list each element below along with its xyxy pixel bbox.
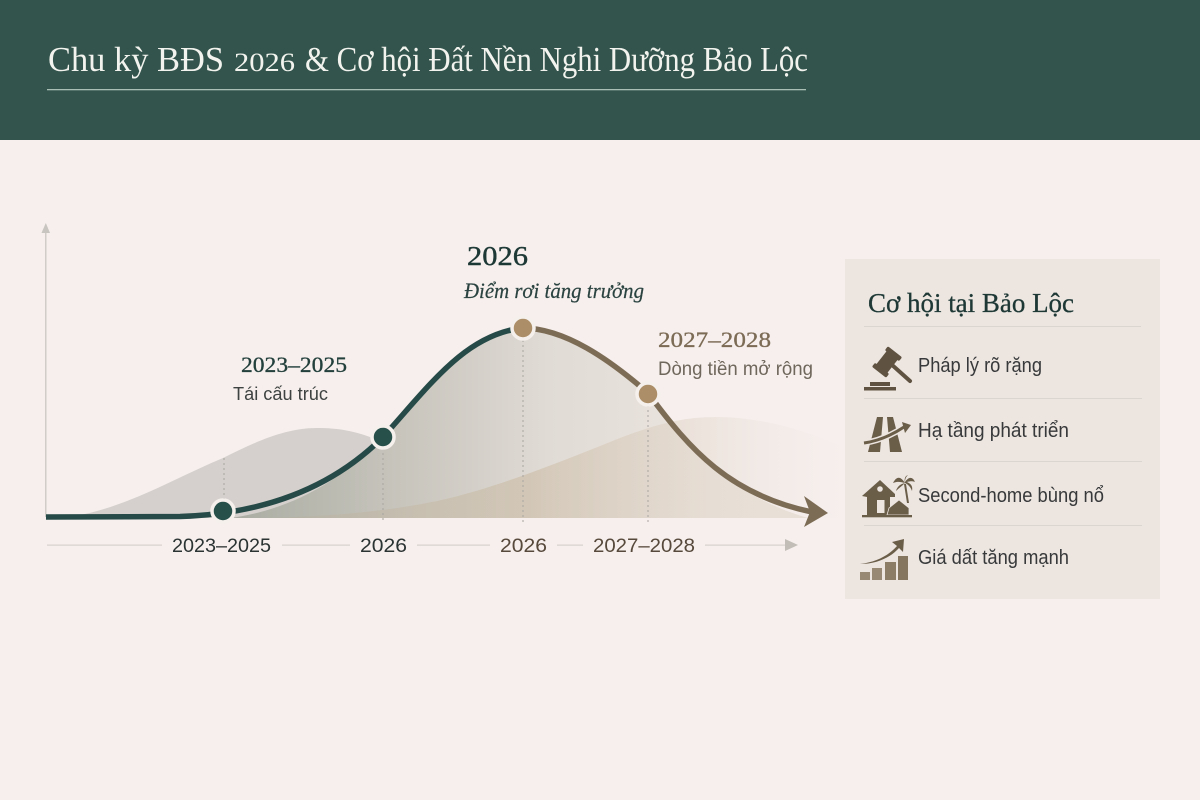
chart (42, 223, 850, 557)
panel heading: Cơ hội tại Bảo Lộc (868, 288, 1074, 318)
item: legal (864, 346, 1042, 390)
icon: gavel (864, 346, 910, 390)
icon: rising bars (860, 539, 908, 580)
label 2023-2025 (233, 352, 347, 404)
curve: expansion phase with arrow (522, 328, 828, 527)
time axis: 2026 (500, 536, 547, 557)
growth hill (270, 417, 850, 518)
title (48, 40, 808, 79)
label 2027-2028: 2027–2028 (658, 327, 771, 352)
title: 2026 (234, 48, 295, 77)
label 2027-2028: Dòng tiền mở rộng (658, 359, 813, 380)
label 2023-2025: 2023–2025 (241, 352, 347, 377)
label 2027-2028 (658, 327, 813, 380)
panel: opportunities in Bao Loc (845, 259, 1160, 599)
item: legal: Pháp lý rõ rặng (918, 355, 1042, 377)
icon: house and palm (862, 475, 915, 517)
label 2023-2025: Tái cấu trúc (233, 384, 328, 404)
title: Chu kỳ BĐS (48, 40, 224, 79)
y axis (42, 223, 50, 517)
item: second home: Second-home bùng nổ (918, 485, 1104, 507)
item: infrastructure: Hạ tầng phát triển (918, 420, 1069, 442)
guide lines (224, 340, 648, 522)
label 2026 (463, 241, 644, 303)
item: land price (860, 539, 1069, 580)
curve: growth phase (46, 328, 522, 517)
icon: road with arrow (864, 417, 911, 452)
main hill area (230, 328, 808, 518)
label 2026: Điểm rơi tăng trưởng (463, 278, 644, 303)
marker 2027-2028 (637, 383, 659, 405)
marker 2026 rising (372, 426, 394, 448)
item: infrastructure (864, 417, 1069, 452)
item: second home (862, 475, 1104, 517)
header band (0, 0, 1200, 140)
time axis: 2023–2025 (172, 536, 271, 557)
item: land price: Giá dất tăng mạnh (918, 547, 1069, 569)
marker 2026 peak (512, 317, 534, 339)
title: & Cơ hội Đất Nền Nghi Dưỡng Bảo Lộc (305, 40, 808, 79)
time axis (47, 536, 798, 557)
time axis: 2027–2028 (593, 536, 695, 557)
background hill: restructuring (60, 428, 430, 518)
marker 2023-2025 (212, 500, 234, 522)
label 2026: 2026 (467, 241, 528, 271)
time axis: 2026 (360, 536, 407, 557)
